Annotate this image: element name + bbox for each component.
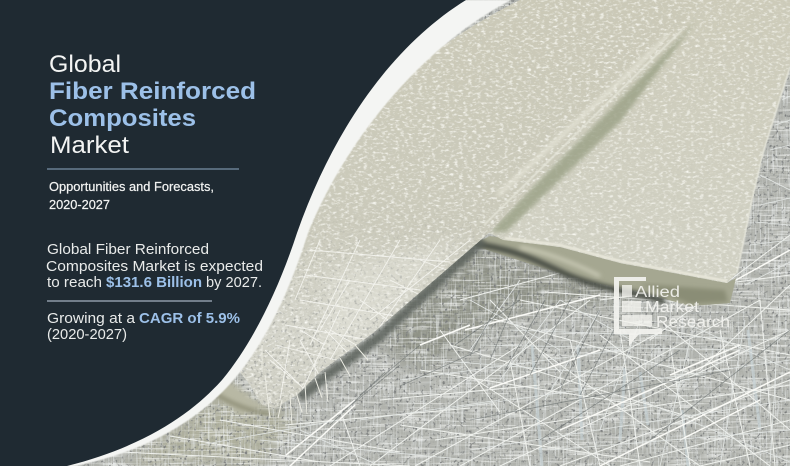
photo: fold shadow on sheet [490,20,697,232]
photo: upper right sheet [474,0,790,307]
title block [49,51,256,159]
logo wordmark: Allied [635,284,680,301]
subtitle [49,180,214,212]
logo wordmark: Market [645,299,700,316]
photo: shadow under frayed sheet [300,240,483,398]
CAGR text: Growing at a [47,310,136,327]
title: Global: Global [49,51,121,78]
CAGR text [47,310,240,343]
white curved band [0,0,511,466]
photo: upper left sheet with frayed end [240,0,702,425]
dark left panel [0,0,466,466]
market value text: Composites Market is expected [46,258,263,275]
market value text: by 2027. [206,274,262,291]
logo wordmark: Research [656,314,730,331]
logo: Allied Market Research [614,277,730,346]
CAGR text: (2020-2027) [47,326,127,343]
CAGR text: CAGR of 5.9% [139,310,240,327]
title: Fiber Reinforced: Fiber Reinforced [49,78,256,105]
subtitle: 2020-2027 [49,198,110,212]
market value text [46,241,263,291]
logo wordmark [635,284,730,331]
market value text: to reach [47,274,102,291]
title: Composites: Composites [49,105,196,132]
photo: sheet right edge highlight [737,67,790,273]
photo: olive ground near curve [212,380,270,414]
logo icon: speech bubble [614,277,662,346]
title: Market: Market [50,132,129,159]
photo: sheet underside and shadow [472,236,736,306]
subtitle: Opportunities and Forecasts, [49,180,214,194]
market value text: $131.6 Billion [106,274,202,291]
market value text: Global Fiber Reinforced [47,241,209,258]
